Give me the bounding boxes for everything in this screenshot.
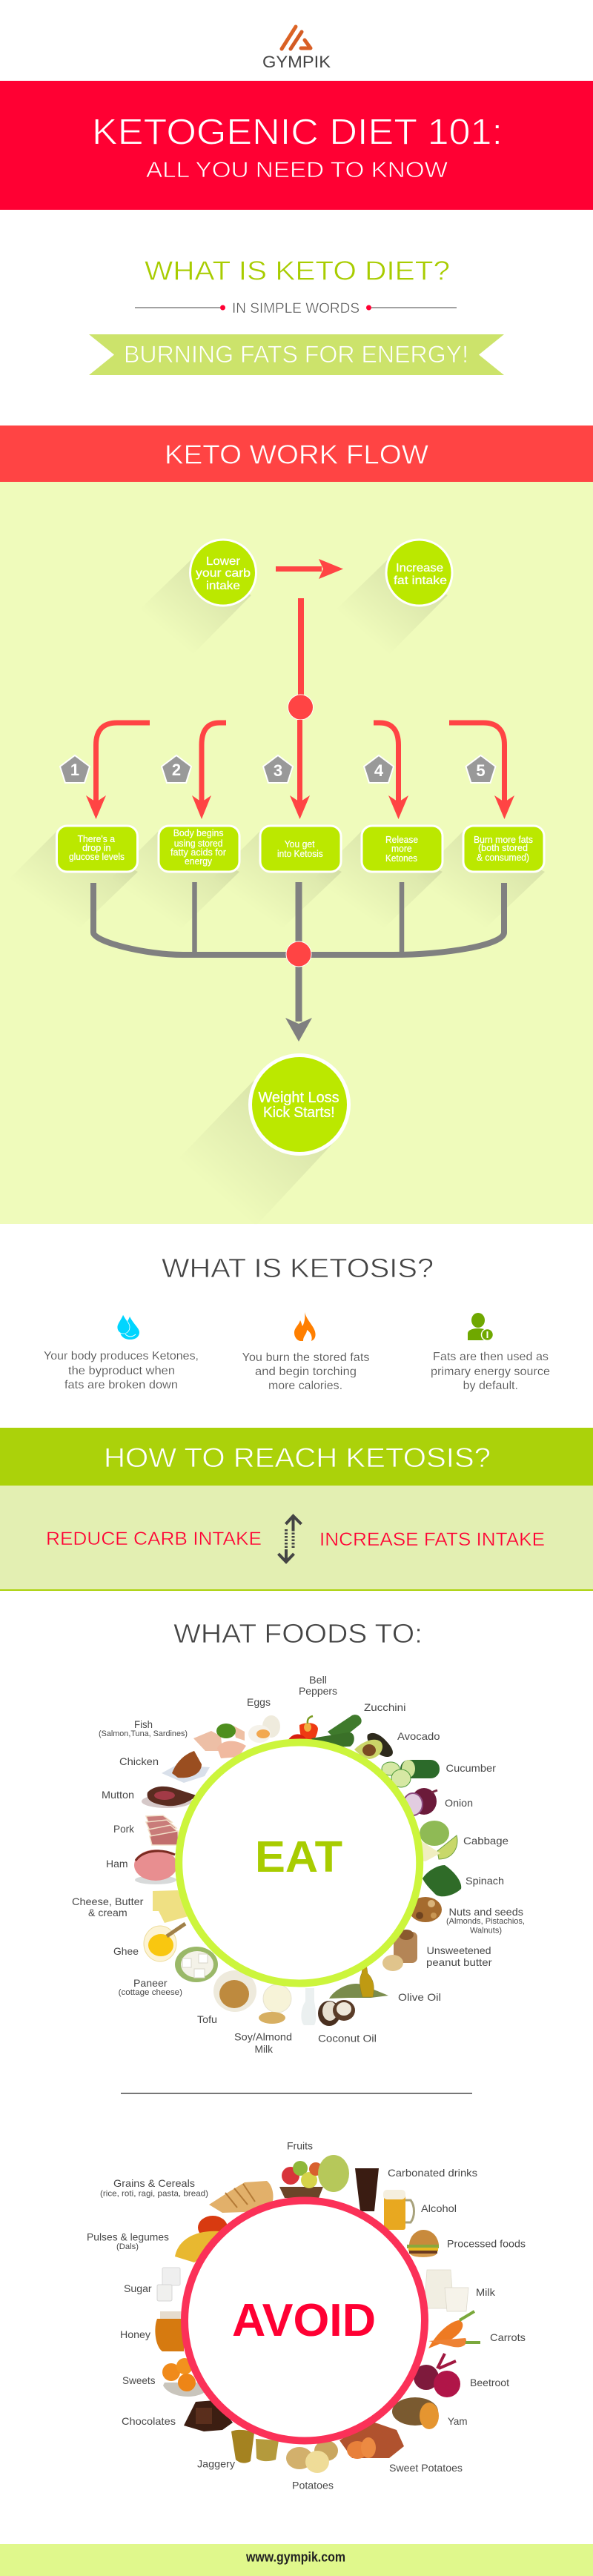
footer [0, 2544, 593, 2576]
food: ham: Ham [106, 1858, 127, 1870]
heading band: keto work flow [0, 426, 593, 482]
circle: increase fat intake: fat intake [394, 575, 447, 587]
food: cabbage [420, 1821, 508, 1861]
food: sugar [124, 2268, 180, 2301]
panel: keto work flow diagram [0, 482, 593, 1238]
arrow: carb to fat [276, 559, 343, 579]
text: body produces ketones [44, 1350, 199, 1391]
ribbon: burning fats for energy [89, 334, 504, 375]
step 5 box [463, 826, 544, 872]
circle: lower your carb intake: Lower [206, 555, 241, 568]
food: chocolates [122, 2400, 233, 2431]
food: sugar: Sugar [124, 2282, 152, 2294]
food: cheese butter cream: Cheese, Butter [72, 1895, 144, 1907]
food: onion [403, 1788, 473, 1815]
step 3 box: You get [285, 838, 315, 850]
food: eggs: Eggs [247, 1696, 271, 1708]
step 1 box: drop in [82, 842, 111, 853]
food: fish: Fish [134, 1718, 153, 1730]
food: pulses and legumes: Pulses & legumes [87, 2231, 169, 2243]
step 1 box: glucose levels [69, 851, 125, 862]
food: chocolates: Chocolates [122, 2415, 176, 2427]
food: pulses and legumes [87, 2216, 228, 2262]
food: avocado: Avocado [397, 1730, 440, 1742]
food: honey: Honey [120, 2328, 150, 2340]
number badges: 4 [374, 761, 384, 780]
text: burn stored fats: You burn the stored fats [242, 1351, 369, 1364]
food: ghee: Ghee [113, 1945, 139, 1957]
logo: Gympik: GYMPIK [262, 53, 331, 71]
food: carrots [428, 2311, 526, 2348]
step 4 box [362, 826, 443, 872]
text: burn stored fats: and begin torching [255, 1365, 357, 1378]
food: onion: Onion [445, 1797, 473, 1809]
food: fish: (Salmon,Tuna, Sardines) [99, 1729, 188, 1738]
heading band: how to reach ketosis: HOW TO REACH KETOSIS? [104, 1443, 491, 1473]
circle: weight loss kick starts [251, 1056, 348, 1153]
food: grains and cereals [100, 2177, 273, 2213]
food: beetroot [414, 2354, 509, 2397]
food: grains and cereals: Grains & Cereals [113, 2177, 195, 2189]
heading: what foods to: WHAT FOODS TO: [173, 1618, 423, 1649]
circle: increase fat intake: Increase [396, 562, 443, 575]
subheading: in simple words: IN SIMPLE WORDS [232, 301, 360, 317]
food: honey [120, 2311, 184, 2351]
heading band: keto work flow: KETO WORK FLOW [165, 439, 428, 470]
step 4 box: Release [385, 834, 418, 845]
number badges: 1 [70, 761, 79, 779]
circle: weight loss kick starts: Kick Starts! [263, 1105, 335, 1121]
food: spinach [423, 1865, 504, 1896]
food: bell peppers [286, 1674, 337, 1751]
food: paneer: Paneer [133, 1977, 168, 1989]
food: bell peppers: Bell [309, 1674, 327, 1686]
food: carrots: Carrots [490, 2331, 526, 2343]
divider [121, 2093, 472, 2094]
title banner: KETOGENIC DIET 101: [92, 113, 503, 153]
food: tofu: Tofu [197, 2013, 217, 2025]
step 2 box: Body begins [173, 827, 224, 838]
food: nuts and seeds [409, 1897, 525, 1935]
food: chicken: Chicken [119, 1755, 159, 1767]
food: fruits [279, 2139, 349, 2198]
food: potatoes [286, 2440, 338, 2491]
step 5 box: Burn more fats [474, 834, 533, 845]
food: coconut oil [301, 1988, 377, 2044]
food: nuts and seeds: (Almonds, Pistachios, [446, 1917, 525, 1926]
step 4 box: more [391, 843, 412, 854]
panel: foods to avoid [87, 2139, 526, 2491]
food: pork: Pork [113, 1823, 135, 1835]
heading: what is keto diet: WHAT IS KETO DIET? [145, 255, 450, 286]
text: primary energy source: Fats are then used as [433, 1351, 549, 1363]
food: milk: Milk [476, 2286, 496, 2298]
ring: avoid [185, 2200, 425, 2440]
panel: reduce carb increase fats: REDUCE CARB INTAKE [46, 1529, 262, 1549]
icon: person with badge [468, 1313, 494, 1340]
food: avocado [354, 1730, 440, 1759]
panel: reduce carb increase fats: INCREASE FATS INTAKE [319, 1529, 545, 1550]
food: pork [113, 1815, 179, 1845]
food: cabbage: Cabbage [463, 1835, 508, 1847]
food: olive oil [329, 1963, 441, 2003]
subheading: in simple words [135, 301, 457, 317]
food: pulses and legumes: (Dals) [116, 2242, 139, 2251]
food: cheese butter cream: & cream [88, 1907, 127, 1918]
step 3 box [260, 826, 341, 872]
food: alcohol [383, 2190, 457, 2230]
gray merge connector [93, 882, 504, 1042]
circle: lower your carb intake [190, 540, 256, 606]
circle: lower your carb intake: intake [206, 580, 240, 592]
heading band: how to reach ketosis [0, 1428, 593, 1486]
food: peanut butter: Unsweetened [427, 1944, 491, 1956]
ring: avoid: AVOID [232, 2295, 376, 2346]
step 2 box: fatty acids for [170, 847, 227, 858]
heading: what is ketosis: WHAT IS KETOSIS? [162, 1253, 434, 1283]
step 1 box: There's a [78, 833, 116, 844]
food: cheese butter cream [72, 1890, 188, 1923]
food: mutton [102, 1787, 196, 1808]
icon: flame [294, 1312, 316, 1341]
number badges: 3 [274, 761, 282, 780]
food: soy almond milk: Milk [255, 2043, 274, 2055]
food: zucchini: Zucchini [364, 1701, 406, 1713]
text: primary energy source: by default. [463, 1380, 518, 1392]
food: nuts and seeds: Walnuts) [470, 1926, 502, 1935]
food: mutton: Mutton [102, 1789, 134, 1801]
food: eggs [247, 1696, 280, 1743]
food: carbonated drinks: Carbonated drinks [388, 2167, 477, 2179]
food: yam [392, 2397, 467, 2429]
food: jaggery: Jaggery [197, 2458, 235, 2470]
text: body produces ketones: Your body produces Ketones, [44, 1350, 199, 1363]
food: cucumber [382, 1760, 496, 1787]
circle: increase fat intake [386, 540, 452, 606]
food: milk [424, 2270, 496, 2311]
ring: eat: EAT [255, 1832, 342, 1881]
step 2 box [159, 826, 239, 872]
food: soy almond milk [234, 1984, 292, 2055]
title banner [0, 81, 593, 210]
food: chicken [119, 1751, 210, 1783]
food: sweets [122, 2358, 206, 2397]
step 3 box: into Ketosis [277, 848, 323, 859]
step 2 box: using stored [174, 838, 222, 849]
text: primary energy source [431, 1351, 550, 1392]
food: peanut butter: peanut butter [426, 1956, 492, 1968]
ring: eat [179, 1742, 420, 1984]
text: primary energy source: primary energy source [431, 1365, 550, 1378]
food: fish [99, 1718, 246, 1758]
section: what is ketosis [44, 1253, 550, 1392]
food: bell peppers: Peppers [299, 1685, 337, 1697]
long shadows [0, 558, 545, 1238]
food: yam: Yam [448, 2415, 467, 2427]
food: jaggery [197, 2430, 279, 2470]
step 5 box: & consumed) [477, 852, 529, 863]
panel: reduce carb increase fats [0, 1486, 593, 1591]
food: alcohol: Alcohol [421, 2202, 457, 2214]
food: processed foods [407, 2230, 526, 2257]
food: paneer: (cottage cheese) [119, 1988, 182, 1997]
text: burn stored fats: more calories. [268, 1380, 342, 1392]
number badges: 5 [476, 761, 486, 780]
food: peanut butter [382, 1930, 492, 1971]
food: tofu [197, 1970, 256, 2025]
icon: up and down arrows [279, 1516, 301, 1562]
food: soy almond milk: Soy/Almond [234, 2031, 292, 2043]
circle: lower your carb intake: your carb [196, 567, 251, 580]
food: processed foods: Processed foods [447, 2238, 526, 2250]
text: body produces ketones: the byproduct when [68, 1365, 175, 1377]
food: potatoes: Potatoes [292, 2479, 334, 2491]
step 5 box: (both stored [478, 842, 528, 853]
step 1 box [56, 826, 138, 872]
food: zucchini [311, 1701, 406, 1748]
food: sweet potatoes: Sweet Potatoes [389, 2462, 463, 2474]
food: fruits: Fruits [287, 2139, 313, 2151]
food: cucumber: Cucumber [446, 1762, 496, 1774]
food: beetroot: Beetroot [470, 2377, 509, 2388]
ribbon: burning fats for energy: BURNING FATS FOR ENERGY! [124, 341, 468, 368]
food: sweets: Sweets [122, 2374, 156, 2386]
step 2 box: energy [185, 855, 212, 867]
step 4 box: Ketones [385, 852, 417, 864]
circle: weight loss kick starts: Weight Loss [258, 1090, 339, 1106]
food: carbonated drinks [355, 2167, 477, 2211]
panel: foods to eat [72, 1674, 525, 2055]
food: ham [106, 1850, 177, 1884]
food: paneer [119, 1947, 218, 1997]
food: grains and cereals: (rice, roti, ragi, pasta, bread) [100, 2190, 208, 2199]
food: coconut oil: Coconut Oil [318, 2033, 377, 2044]
number badges: 2 [172, 761, 181, 779]
food: nuts and seeds: Nuts and seeds [449, 1906, 523, 1918]
text: body produces ketones: fats are broken down [64, 1379, 178, 1391]
food: olive oil: Olive Oil [398, 1991, 441, 2003]
food: spinach: Spinach [466, 1875, 504, 1887]
footer: www.gympik.com [245, 2550, 345, 2565]
icon: water drops [117, 1314, 139, 1340]
branch arrows [86, 720, 514, 819]
logo: Gympik [262, 27, 331, 71]
food: ghee [113, 1924, 185, 1961]
number badges [60, 755, 495, 783]
food: sweet potatoes [339, 2421, 463, 2474]
text: burn stored fats [242, 1351, 369, 1392]
connector with red node [288, 598, 313, 720]
section: what is keto diet [89, 255, 504, 375]
title banner: ALL YOU NEED TO KNOW [146, 158, 448, 182]
